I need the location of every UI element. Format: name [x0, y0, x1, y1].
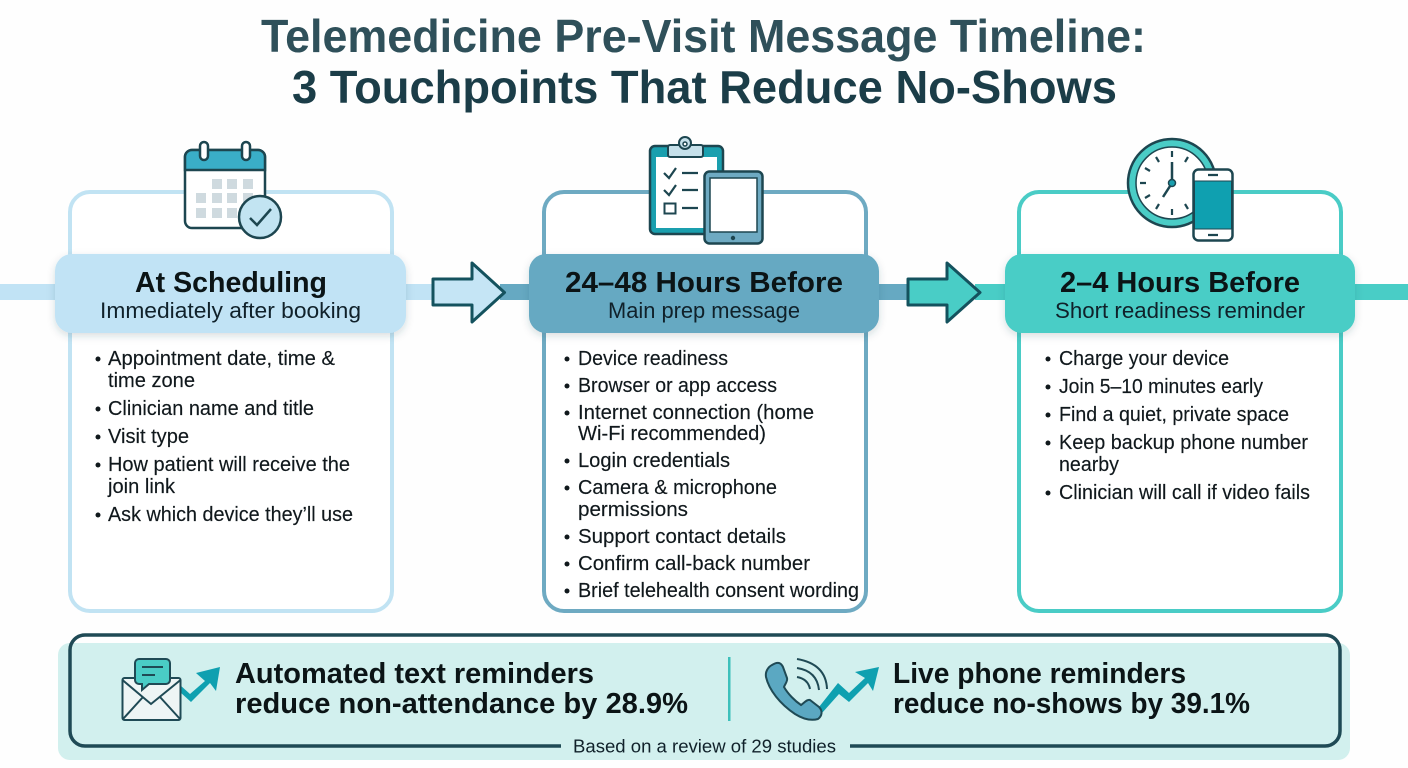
header: at scheduling	[55, 254, 406, 333]
panel: at scheduling	[55, 142, 406, 611]
list: 2-4 hours items: Charge your device	[1059, 348, 1229, 370]
list: at scheduling items: Ask which device they’ll use	[108, 504, 353, 526]
list: 24-48 hours items: Device readiness	[578, 348, 728, 370]
header: 2-4 hours before	[1005, 254, 1355, 333]
list: 24-48 hours items: Internet connection (home	[578, 402, 814, 424]
text: automated reminders stat	[235, 658, 688, 720]
list: 24-48 hours items: Wi-Fi recommended)	[578, 423, 766, 445]
title: Telemedicine Pre-Visit Message Timeline:	[261, 10, 1146, 62]
header: 2-4 hours before: 2–4 Hours Before	[1060, 267, 1300, 299]
list: 24-48 hours items: permissions	[578, 499, 688, 521]
icon: envelope with message and arrow	[122, 659, 220, 720]
panel: evidence banner	[58, 635, 1350, 760]
text: live reminders stat: Live phone reminders	[893, 658, 1186, 690]
list: 24-48 hours items: Brief telehealth consent wording	[578, 580, 859, 602]
arrow: scheduling to 24-48 hours	[433, 263, 504, 322]
header: 24-48 hours before: Main prep message	[608, 298, 800, 323]
list: 24-48 hours items	[564, 348, 859, 602]
list: at scheduling items: time zone	[108, 370, 195, 392]
header: 2-4 hours before: Short readiness reminder	[1055, 298, 1305, 323]
list: 2-4 hours items: Clinician will call if video fails	[1059, 482, 1310, 504]
timeline bar	[0, 284, 1408, 300]
title: 3 Touchpoints That Reduce No-Shows	[292, 61, 1117, 113]
list: 2-4 hours items: Join 5–10 minutes early	[1059, 376, 1263, 398]
panel: 24-48 hours before	[529, 137, 879, 611]
list: at scheduling items	[96, 348, 353, 526]
list: at scheduling items: Appointment date, time &	[108, 348, 336, 370]
icon: calendar with check	[185, 142, 281, 238]
icon: clock and phone	[1128, 139, 1232, 240]
header: at scheduling: Immediately after booking	[100, 298, 361, 323]
header: 24-48 hours before	[529, 254, 879, 333]
list: 24-48 hours items: Browser or app access	[578, 375, 777, 397]
header: 24-48 hours before: 24–48 Hours Before	[565, 267, 843, 299]
list: 2-4 hours items: Keep backup phone number	[1059, 432, 1308, 454]
list: 24-48 hours items: Camera & microphone	[578, 477, 777, 499]
list: at scheduling items: Visit type	[108, 426, 189, 448]
list: 24-48 hours items: Confirm call-back number	[578, 553, 810, 575]
text: automated reminders stat: Automated text reminders	[235, 658, 594, 690]
list: 24-48 hours items: Support contact details	[578, 526, 786, 548]
list: 2-4 hours items	[1046, 348, 1310, 504]
arrow: 24-48 hours to 2-4 hours	[908, 263, 980, 322]
divider	[728, 657, 730, 721]
text: automated reminders stat: reduce non-attendance by 28.9%	[235, 688, 688, 720]
panel: 2-4 hours before	[1005, 139, 1355, 611]
text: live reminders stat	[893, 658, 1250, 720]
header: at scheduling: At Scheduling	[135, 267, 327, 299]
list: at scheduling items: How patient will receive the	[108, 454, 350, 476]
icon: phone with signal and arrow	[766, 659, 879, 720]
list: at scheduling items: Clinician name and title	[108, 398, 314, 420]
list: at scheduling items: join link	[107, 476, 176, 498]
source note: Based on a review of 29 studies	[573, 736, 836, 756]
text: live reminders stat: reduce no-shows by 39.1%	[893, 688, 1250, 720]
title	[261, 10, 1146, 113]
list: 24-48 hours items: Login credentials	[578, 450, 730, 472]
icon: clipboard and tablet	[650, 137, 762, 244]
list: 2-4 hours items: Find a quiet, private space	[1059, 404, 1289, 426]
list: 2-4 hours items: nearby	[1059, 454, 1119, 476]
